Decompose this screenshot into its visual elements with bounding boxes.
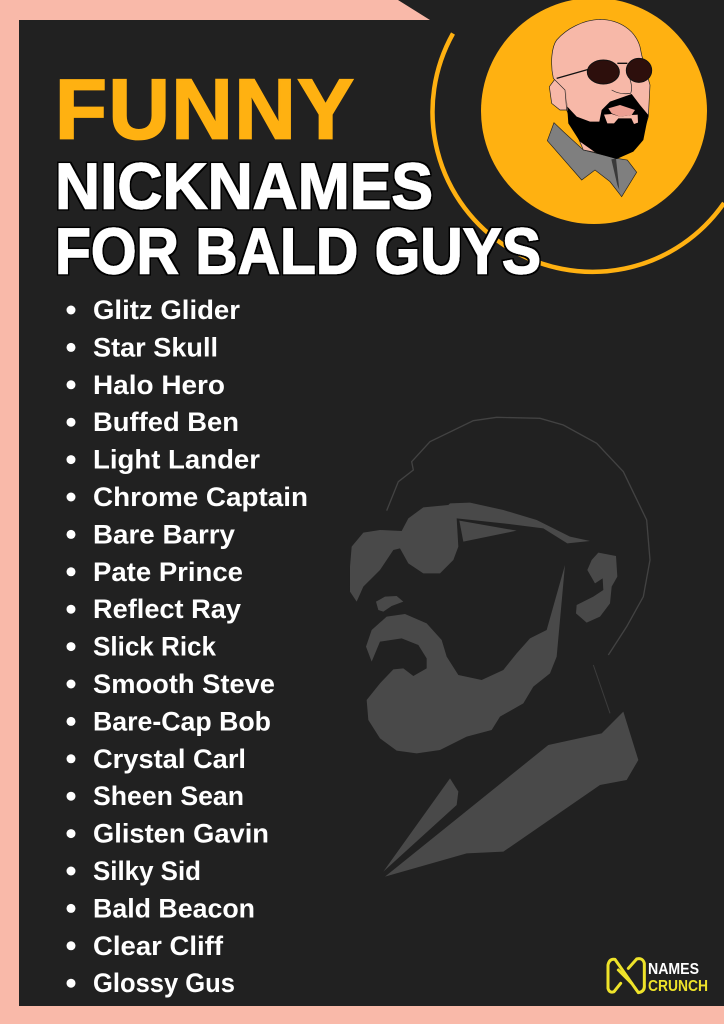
title line: FUNNY: FUNNY [55, 62, 354, 158]
list items: Halo Hero [93, 370, 225, 400]
silhouette: jacket [385, 712, 638, 877]
list items: Bald Beacon [93, 893, 255, 923]
icon: bald man avatar [547, 19, 652, 197]
bullets [66, 306, 76, 988]
title line: NICKNAMES: NICKNAMES [55, 150, 433, 222]
list items: Clear Cliff [93, 931, 224, 961]
avatar: chin patch [604, 114, 638, 124]
orange avatar circle [481, 0, 707, 224]
list items: Crystal Carl [93, 744, 246, 774]
list items: Bare Barry [93, 519, 235, 549]
list items: Slick Rick [93, 632, 217, 662]
list items: Buffed Ben [93, 407, 239, 437]
list items: Sheen Sean [93, 781, 244, 811]
list items: Star Skull [93, 332, 218, 362]
logo icon [608, 959, 644, 993]
silhouette: collar [383, 778, 458, 872]
background silhouette of bearded man [350, 417, 650, 877]
list items: Glitz Glider [93, 295, 240, 325]
list items: Light Lander [93, 445, 260, 475]
avatar: head [552, 19, 650, 157]
avatar: lips [608, 105, 635, 117]
title [55, 62, 541, 288]
silhouette: beard [366, 565, 565, 753]
avatar: shirt placket [611, 158, 622, 196]
avatar: ear [549, 79, 568, 110]
list items: Glisten Gavin [93, 819, 269, 849]
silhouette: neck line [593, 665, 610, 713]
list items: Silky Sid [93, 856, 201, 886]
avatar: collar [547, 123, 637, 197]
list items: Glossy Gus [93, 968, 235, 998]
logo wordmark: CRUNCH: CRUNCH [648, 978, 708, 995]
list items: Bare-Cap Bob [93, 706, 271, 736]
title line: FOR BALD GUYS: FOR BALD GUYS [55, 214, 541, 288]
orange ring [433, 34, 724, 272]
avatar: sunglasses [557, 58, 652, 84]
silhouette: lens highlight [459, 521, 517, 542]
avatar: beard [566, 90, 648, 159]
list items [93, 295, 308, 998]
list items: Smooth Steve [93, 669, 275, 699]
list items: Pate Prince [93, 557, 243, 587]
silhouette: head outline [387, 417, 650, 655]
avatar: nose [612, 75, 632, 94]
silhouette: sunglasses [350, 503, 590, 602]
logo wordmark: NAMES: NAMES [648, 961, 699, 978]
silhouette: nose [376, 596, 403, 612]
logo: Names Crunch [608, 959, 708, 995]
list items: Chrome Captain [93, 482, 308, 512]
silhouette: ear [576, 553, 617, 623]
list items: Reflect Ray [93, 594, 241, 624]
nickname list [66, 295, 308, 998]
